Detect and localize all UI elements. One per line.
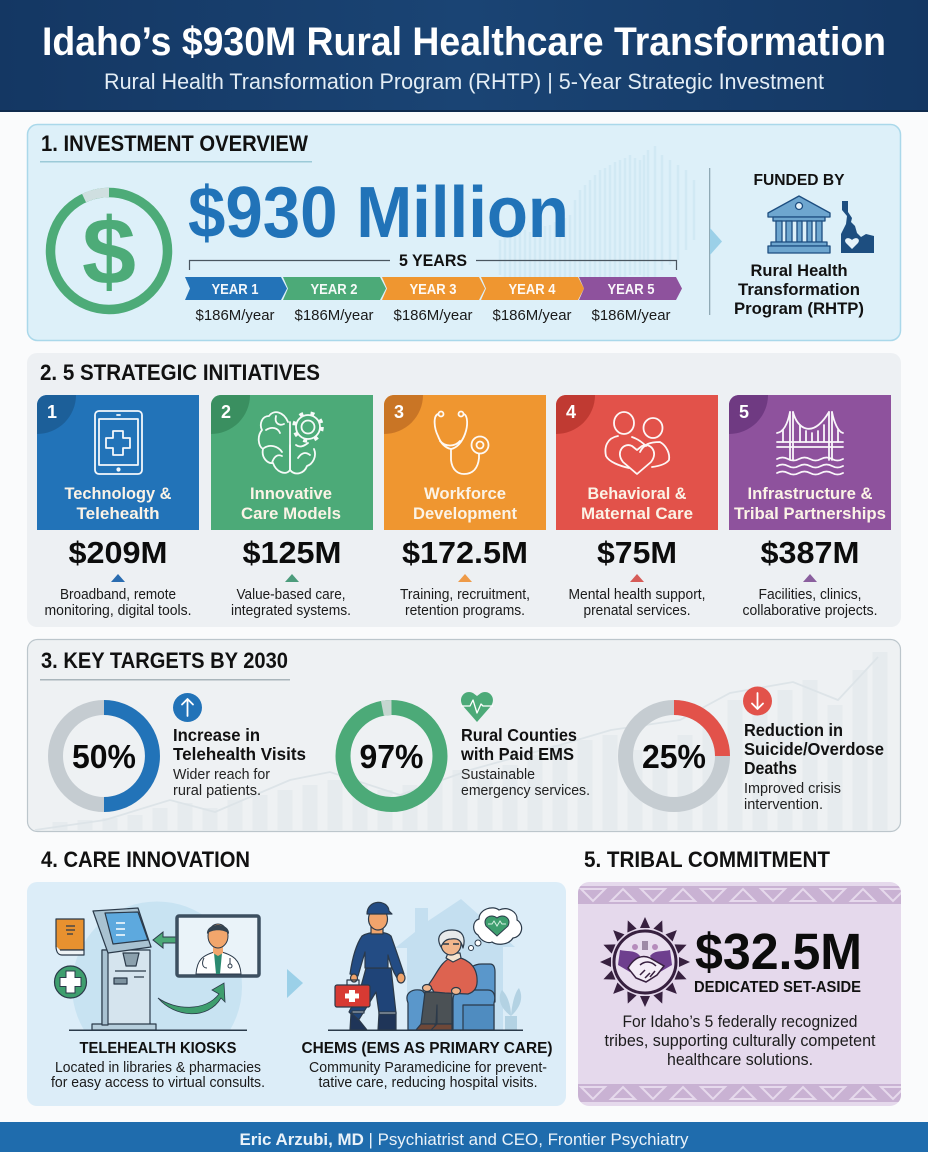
icon: down arrow xyxy=(743,686,772,716)
target: suicide and overdose: Deaths xyxy=(744,758,797,778)
yearly amounts: $186M/year xyxy=(492,307,572,324)
big amount: $32.5M xyxy=(695,923,862,980)
initiative 5: Facilities, clinics, xyxy=(758,587,862,603)
paramedic xyxy=(349,902,405,1030)
set-aside label: DEDICATED SET-ASIDE xyxy=(694,979,861,996)
plant xyxy=(500,988,521,1030)
text: telehealth kiosks: TELEHEALTH KIOSKS xyxy=(80,1040,237,1057)
icon: handshake seal xyxy=(600,917,690,1007)
initiative 4: Mental health support, xyxy=(568,587,706,603)
description: tribes, supporting culturally competent xyxy=(604,1032,876,1050)
text: telehealth kiosks xyxy=(51,1040,265,1091)
initiative 1: 1 xyxy=(47,402,57,422)
icon: Idaho state with heart xyxy=(841,201,874,253)
icon: two people with heart xyxy=(605,412,669,474)
initiative 4: Behavioral & xyxy=(588,484,686,503)
initiative 1 xyxy=(37,395,199,618)
initiative 2 xyxy=(211,395,373,618)
house background xyxy=(395,899,515,1030)
initiative 5: Infrastructure & xyxy=(748,484,872,503)
text: CHEMS xyxy=(302,1040,552,1091)
funder name: Rural Health xyxy=(750,262,848,280)
initiative 5: 5 xyxy=(739,402,749,422)
timeline bracket: 5 YEARS xyxy=(399,252,467,270)
heading: 2. 5 STRATEGIC INITIATIVES xyxy=(40,360,320,385)
donut chart 50% xyxy=(56,708,152,804)
target: telehealth: Wider reach for xyxy=(173,766,270,783)
initiative 5: Tribal Partnerships xyxy=(734,504,886,523)
target: suicide and overdose: intervention. xyxy=(744,796,823,813)
heading: tribal commitment: 5. TRIBAL COMMITMENT xyxy=(584,847,830,872)
thought bubble with heart xyxy=(468,908,522,950)
icon: book xyxy=(56,919,84,955)
footer xyxy=(0,1122,928,1152)
target: suicide and overdose xyxy=(626,686,884,813)
title: Idaho’s $930M Rural Healthcare Transformation xyxy=(42,20,886,64)
target: telehealth: Telehealth Visits xyxy=(173,744,306,764)
initiative 3 xyxy=(384,395,546,618)
target: paid EMS: emergency services. xyxy=(461,782,590,799)
icon: bridge over water xyxy=(777,412,843,474)
funded by label: FUNDED BY xyxy=(754,172,845,189)
target: paid EMS: with Paid EMS xyxy=(460,744,574,764)
donut chart 50%: 50% xyxy=(72,738,136,775)
initiative 3: 3 xyxy=(394,402,404,422)
panel: strategic initiatives xyxy=(0,353,901,627)
year chevrons: YEAR 2 xyxy=(310,282,358,298)
funder name xyxy=(734,262,864,318)
initiative 1: monitoring, digital tools. xyxy=(44,603,192,619)
arrow xyxy=(710,228,722,255)
text: CHEMS: Community Paramedicine for prevent- xyxy=(309,1060,547,1076)
big amount: $930 Million xyxy=(188,173,569,253)
icon: arrow to kiosk xyxy=(153,932,176,948)
icon: stethoscope xyxy=(435,412,488,474)
initiative 1: Technology & xyxy=(64,484,172,503)
target: paid EMS: Sustainable xyxy=(461,766,535,783)
description: For Idaho’s 5 federally recognized xyxy=(622,1013,858,1031)
icon: brain and gear xyxy=(259,412,322,473)
funder name: Program (RHTP) xyxy=(734,300,864,318)
target: telehealth: Increase in xyxy=(173,725,260,745)
heading: 1. INVESTMENT OVERVIEW xyxy=(41,131,309,156)
initiative 3: $172.5M xyxy=(402,535,528,570)
target: paid EMS xyxy=(343,692,590,804)
initiative 1: Broadband, remote xyxy=(60,587,176,603)
initiative 2: Value-based care, xyxy=(236,587,346,603)
description xyxy=(604,1013,876,1069)
CHEMS illustration xyxy=(328,899,523,1031)
donut chart 97% xyxy=(343,708,440,804)
arrow xyxy=(287,969,303,998)
year chevrons: YEAR 1 xyxy=(212,282,258,298)
icon: up arrow xyxy=(173,693,202,722)
initiative 4: 4 xyxy=(566,402,576,422)
initiative 3: Development xyxy=(413,504,517,523)
text: CHEMS: tative care, reducing hospital visits. xyxy=(318,1075,538,1091)
panel: investment overview xyxy=(28,124,900,340)
year chevrons: YEAR 5 xyxy=(608,282,654,298)
year chevrons: YEAR 4 xyxy=(508,282,556,298)
initiative 4: $75M xyxy=(597,535,677,570)
icon: plus badge xyxy=(54,966,86,998)
text: CHEMS: CHEMS (EMS AS PRIMARY CARE) xyxy=(302,1040,552,1057)
yearly amounts: $186M/year xyxy=(294,307,374,324)
panel: key targets xyxy=(28,640,900,832)
telehealth kiosks illustration xyxy=(54,901,259,1031)
initiative 5: $387M xyxy=(760,535,860,570)
yearly amounts xyxy=(196,307,670,324)
year chevrons xyxy=(185,277,682,300)
icon: tablet xyxy=(95,411,142,474)
initiative 5: collaborative projects. xyxy=(742,603,878,619)
seated elder xyxy=(416,930,477,1030)
icon: video monitor with doctor xyxy=(177,916,259,976)
icon: curved green arrow xyxy=(158,983,225,1014)
yearly amounts: $186M/year xyxy=(394,307,472,324)
target: suicide and overdose: Reduction in xyxy=(744,720,843,740)
initiative 2: Innovative xyxy=(250,484,332,503)
donut chart 25%: 25% xyxy=(642,738,706,775)
icon: kiosk xyxy=(92,908,156,1030)
icon: government bank xyxy=(768,196,830,253)
initiative 2: integrated systems. xyxy=(231,603,351,619)
initiative 5 xyxy=(729,395,891,618)
armchair xyxy=(407,964,495,1030)
target: paid EMS: Rural Counties xyxy=(461,725,577,745)
timeline bracket xyxy=(190,252,676,270)
initiative 3: retention programs. xyxy=(405,603,525,619)
footer: Eric Arzubi, MD | Psychiatrist and CEO, Frontier Psychiatry xyxy=(240,1131,689,1149)
panel: care innovation xyxy=(27,882,566,1106)
yearly amounts: $186M/year xyxy=(592,307,670,324)
initiative 3: Workforce xyxy=(424,484,506,503)
target: suicide and overdose: Improved crisis xyxy=(744,780,841,797)
initiative 4 xyxy=(556,395,718,618)
target: telehealth xyxy=(56,693,306,804)
subtitle: Rural Health Transformation Program (RHTP) | 5-Year Strategic Investment xyxy=(104,69,824,94)
panel: tribal commitment xyxy=(578,882,901,1106)
initiative 2: Care Models xyxy=(241,504,341,523)
year chevrons: YEAR 3 xyxy=(410,282,456,298)
target: telehealth: rural patients. xyxy=(173,782,261,799)
description: healthcare solutions. xyxy=(667,1051,813,1069)
yearly amounts: $186M/year xyxy=(196,307,274,324)
initiative 1: Telehealth xyxy=(76,504,160,523)
initiative 3: Training, recruitment, xyxy=(400,587,530,603)
text: telehealth kiosks: Located in libraries & pharmacies xyxy=(55,1060,261,1076)
heading: care innovation: 4. CARE INNOVATION xyxy=(41,847,250,872)
icon: dollar coin: $ xyxy=(82,199,136,305)
donut chart 97%: 97% xyxy=(360,738,424,775)
funder name: Transformation xyxy=(738,281,860,299)
header banner xyxy=(0,0,928,112)
initiative 2: $125M xyxy=(242,535,342,570)
icon: dollar coin xyxy=(50,192,168,310)
initiative 2: 2 xyxy=(221,402,231,422)
initiative 4: prenatal services. xyxy=(584,603,690,619)
donut chart 25% xyxy=(626,708,722,804)
heading: 3. KEY TARGETS BY 2030 xyxy=(41,648,288,673)
text: telehealth kiosks: for easy access to virtual consults. xyxy=(51,1075,265,1091)
initiative 4: Maternal Care xyxy=(581,504,693,523)
icon: medical bag xyxy=(335,980,370,1007)
target: suicide and overdose: Suicide/Overdose xyxy=(744,739,884,759)
icon: heart with pulse xyxy=(461,692,493,722)
initiative 1: $209M xyxy=(68,535,168,570)
